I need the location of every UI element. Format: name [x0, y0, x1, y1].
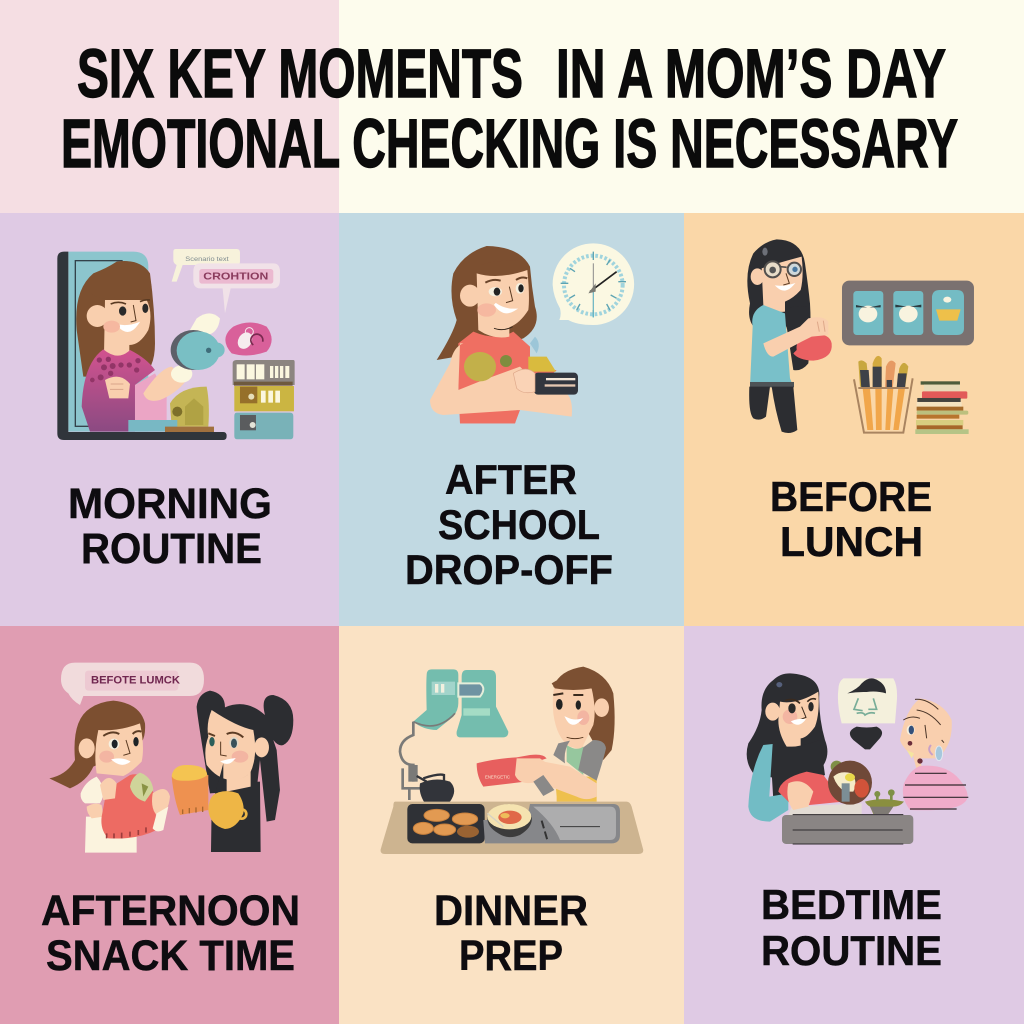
- book stack: [233, 360, 295, 439]
- panel: afternoon snack time: [0, 626, 339, 1024]
- label: dinner prep: DINNER: [434, 887, 588, 935]
- title: [61, 35, 958, 182]
- arm and cable: [400, 713, 455, 800]
- speech bubbles: [172, 249, 280, 313]
- torso and face: [85, 263, 152, 362]
- child: [900, 698, 968, 810]
- table: [782, 803, 913, 844]
- red ball and arm: [763, 317, 832, 361]
- speech bubbles: Scenario text: [185, 256, 229, 263]
- wallet: [513, 369, 578, 395]
- panel: morning routine: [0, 213, 339, 626]
- label: morning routine: [68, 480, 272, 573]
- label: afternoon snack time: SNACK TIME: [46, 932, 295, 980]
- photo board: [842, 281, 974, 345]
- label: before lunch: BEFORE: [770, 473, 932, 520]
- label: before lunch: LUNCH: [780, 518, 923, 565]
- plant bowl: [865, 789, 904, 814]
- blender: [128, 313, 225, 432]
- right mom: [197, 691, 293, 852]
- title: SIX KEY MOMENTS: [77, 35, 523, 112]
- label: before lunch: [770, 473, 932, 565]
- panel: after school drop-off: [339, 213, 684, 626]
- label: afternoon snack time: [41, 887, 300, 980]
- label: after school drop-off: AFTER: [445, 456, 577, 503]
- hair: [437, 246, 537, 360]
- illustration: mom and child at table: [747, 673, 968, 844]
- hair: [76, 261, 155, 377]
- mom body: [748, 692, 825, 822]
- illustration: mom with wallet: [430, 243, 634, 423]
- sweater: [82, 349, 187, 432]
- label: morning routine: MORNING: [68, 480, 272, 528]
- range hood: [413, 669, 508, 737]
- illustration: mom cooking: [381, 667, 643, 854]
- bowl: [487, 804, 532, 837]
- illustration: mom at blender: [57, 249, 295, 440]
- book pile: [915, 381, 969, 434]
- label: bedtime routine: BEDTIME: [761, 881, 942, 928]
- pink emoji bubble: [225, 322, 272, 355]
- kettle: [417, 775, 454, 805]
- label: bedtime routine: ROUTINE: [761, 927, 942, 974]
- label: after school drop-off: SCHOOL: [438, 501, 600, 548]
- pencil cup: [854, 356, 913, 433]
- label: morning routine: ROUTINE: [81, 525, 262, 573]
- hair: [747, 239, 811, 370]
- illustration: two moms with snack: [49, 663, 293, 853]
- body: [430, 260, 572, 423]
- panel: bedtime routine: [684, 626, 1024, 1024]
- label: dinner prep: PREP: [459, 932, 563, 980]
- thought bubble: [838, 678, 897, 749]
- screen frame: [57, 252, 227, 440]
- mom: ENERGETIC: [485, 774, 511, 779]
- label: dinner prep: [434, 887, 588, 980]
- mom: [477, 667, 615, 802]
- speech bubbles: CROHTION: [203, 271, 268, 282]
- speech bubble: [61, 663, 204, 705]
- counter: [381, 802, 643, 854]
- panel: before lunch: [684, 213, 1024, 626]
- panel: dinner prep: [339, 626, 684, 1024]
- griddle with pancakes: [407, 804, 485, 843]
- label: afternoon snack time: AFTERNOON: [41, 887, 300, 935]
- food bowl and hand: [778, 761, 872, 810]
- mom hair: [747, 673, 827, 780]
- label: after school drop-off: DROP-OFF: [405, 546, 613, 593]
- sink: [483, 804, 620, 843]
- left mom: [49, 701, 170, 853]
- illustration: mom with glasses: [747, 239, 974, 434]
- speech bubble: BEFOTE LUMCK: [91, 675, 180, 687]
- panel: header background: [0, 0, 1024, 213]
- clock bubble: [553, 243, 634, 325]
- snack cup: [172, 765, 208, 815]
- label: bedtime routine: [761, 881, 942, 974]
- body: [749, 257, 810, 433]
- label: after school drop-off: [405, 456, 613, 593]
